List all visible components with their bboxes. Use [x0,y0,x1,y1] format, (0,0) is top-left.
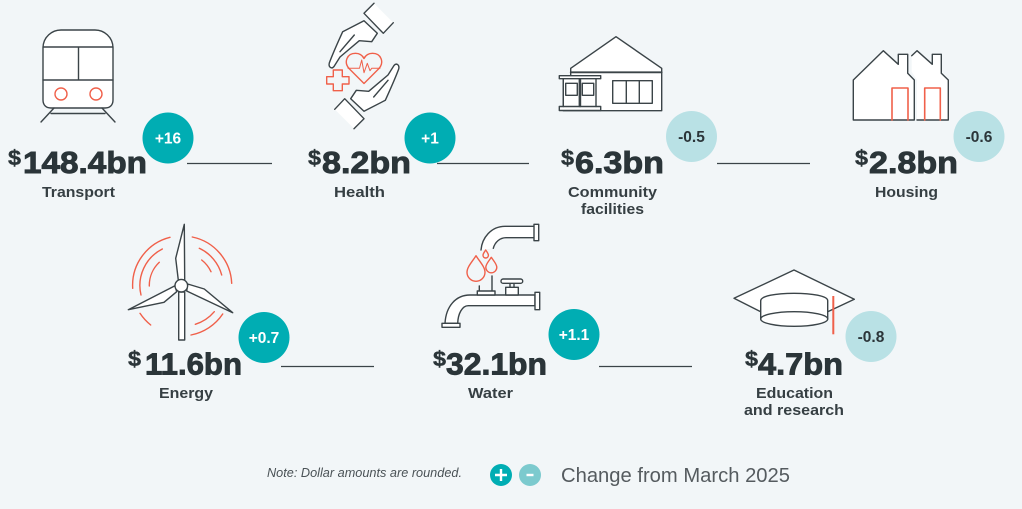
amount: $ [745,348,758,371]
label: and research [744,402,844,419]
change badge [238,312,290,363]
panel: housing [853,51,1004,201]
change badge [846,311,896,362]
amount: $ [128,348,141,371]
panel: health [308,3,529,201]
change badge: -0.8 [858,329,885,346]
connector line [187,162,272,164]
icon: pipes and water drops [442,224,540,327]
change badge: -0.6 [966,129,993,146]
amount: $ [855,147,868,170]
legend [490,464,790,487]
amount: $ [8,147,21,170]
change badge [666,111,717,162]
panel: transport [8,30,272,201]
connector line [717,162,810,164]
change badge [954,111,1004,162]
amount: 6.3bn [575,145,664,180]
label: Education [756,385,833,402]
icon: wind turbine [128,224,233,340]
label: Community [568,184,658,201]
amount: 8.2bn [322,145,411,180]
amount: 11.6bn [145,346,242,382]
change badge [142,112,194,164]
connector line [599,366,692,368]
connector line [437,162,529,164]
note: Note: Dollar amounts are rounded. [267,466,462,480]
amount: 148.4bn [23,145,147,180]
icon: houses [853,51,948,120]
label: Health [334,184,385,201]
change badge [548,309,600,360]
label: Water [468,385,513,402]
amount: $ [561,147,574,170]
change badge: +1 [421,130,439,148]
label: Energy [159,385,214,402]
panel: water [433,224,692,402]
icon: community building [559,37,662,111]
amount: $ [433,348,446,371]
icon: caring hands [327,3,399,129]
change badge: +0.7 [249,330,279,347]
legend text: Change from March 2025 [561,465,790,487]
change badge: -0.5 [678,129,705,146]
connector line [281,366,374,368]
label [744,385,844,419]
icon: minus [519,464,541,486]
amount: $ [308,147,321,170]
icon: train [41,30,115,122]
amount: 2.8bn [869,145,958,180]
panel: energy [128,224,374,402]
icon: graduation cap [734,270,854,334]
panel: community facilities [559,37,810,218]
label [568,184,658,218]
amount: 4.7bn [758,346,843,382]
change badge: +16 [155,130,182,148]
change badge: +1.1 [559,327,590,344]
amount: 32.1bn [446,346,547,382]
change badge [404,112,456,164]
label: facilities [581,201,644,218]
label: Transport [42,184,115,201]
icon: plus [490,464,512,486]
label: Housing [875,184,938,201]
panel: education and research [734,270,896,419]
